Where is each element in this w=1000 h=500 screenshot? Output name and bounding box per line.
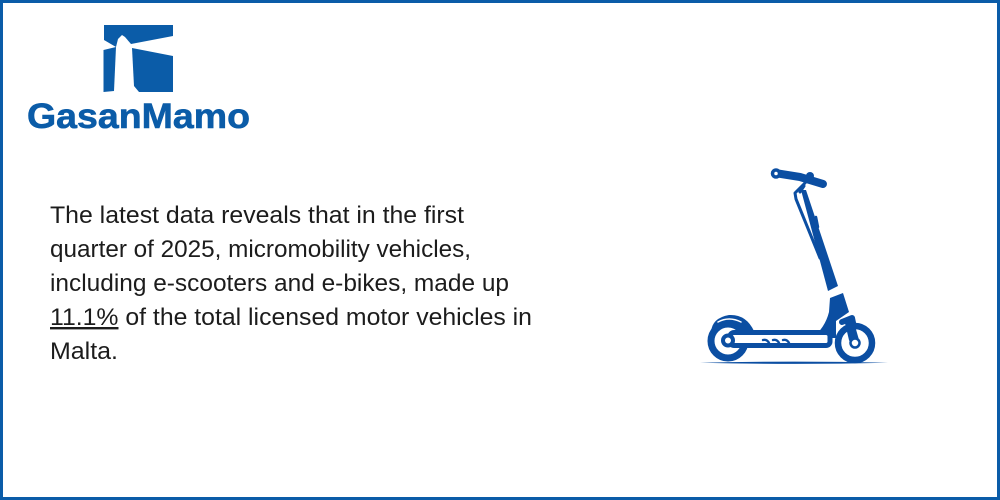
text block: micromobility statement: Malta. — [50, 338, 118, 365]
front fork — [842, 318, 857, 342]
icon: lighthouse — [104, 25, 173, 92]
ground shadow — [700, 362, 888, 364]
rear fender — [711, 315, 754, 334]
logo wordmark: GasanMamo — [27, 97, 250, 136]
text block: micromobility statement — [50, 202, 532, 365]
text block: micromobility statement: 11.1% of the total licensed motor vehicles in — [50, 304, 532, 331]
stem neck and outer rail — [795, 183, 820, 258]
rear hub — [723, 336, 733, 346]
text block: micromobility statement: The latest data reveals that in the first — [50, 202, 464, 229]
main stem — [801, 190, 838, 291]
brake lever — [813, 217, 818, 229]
text block: micromobility statement: including e-scooters and e-bikes, made up — [50, 270, 509, 297]
deck grip marks — [763, 340, 789, 343]
logo: GasanMamo — [27, 25, 250, 136]
handlebar — [778, 174, 823, 184]
icon: electric scooter — [700, 170, 888, 364]
deck — [730, 332, 830, 346]
text block: micromobility statement: quarter of 2025, micromobility vehicles, — [50, 236, 471, 263]
front wheel — [838, 326, 872, 360]
lower stem block — [812, 293, 849, 338]
rear wheel — [711, 324, 745, 358]
